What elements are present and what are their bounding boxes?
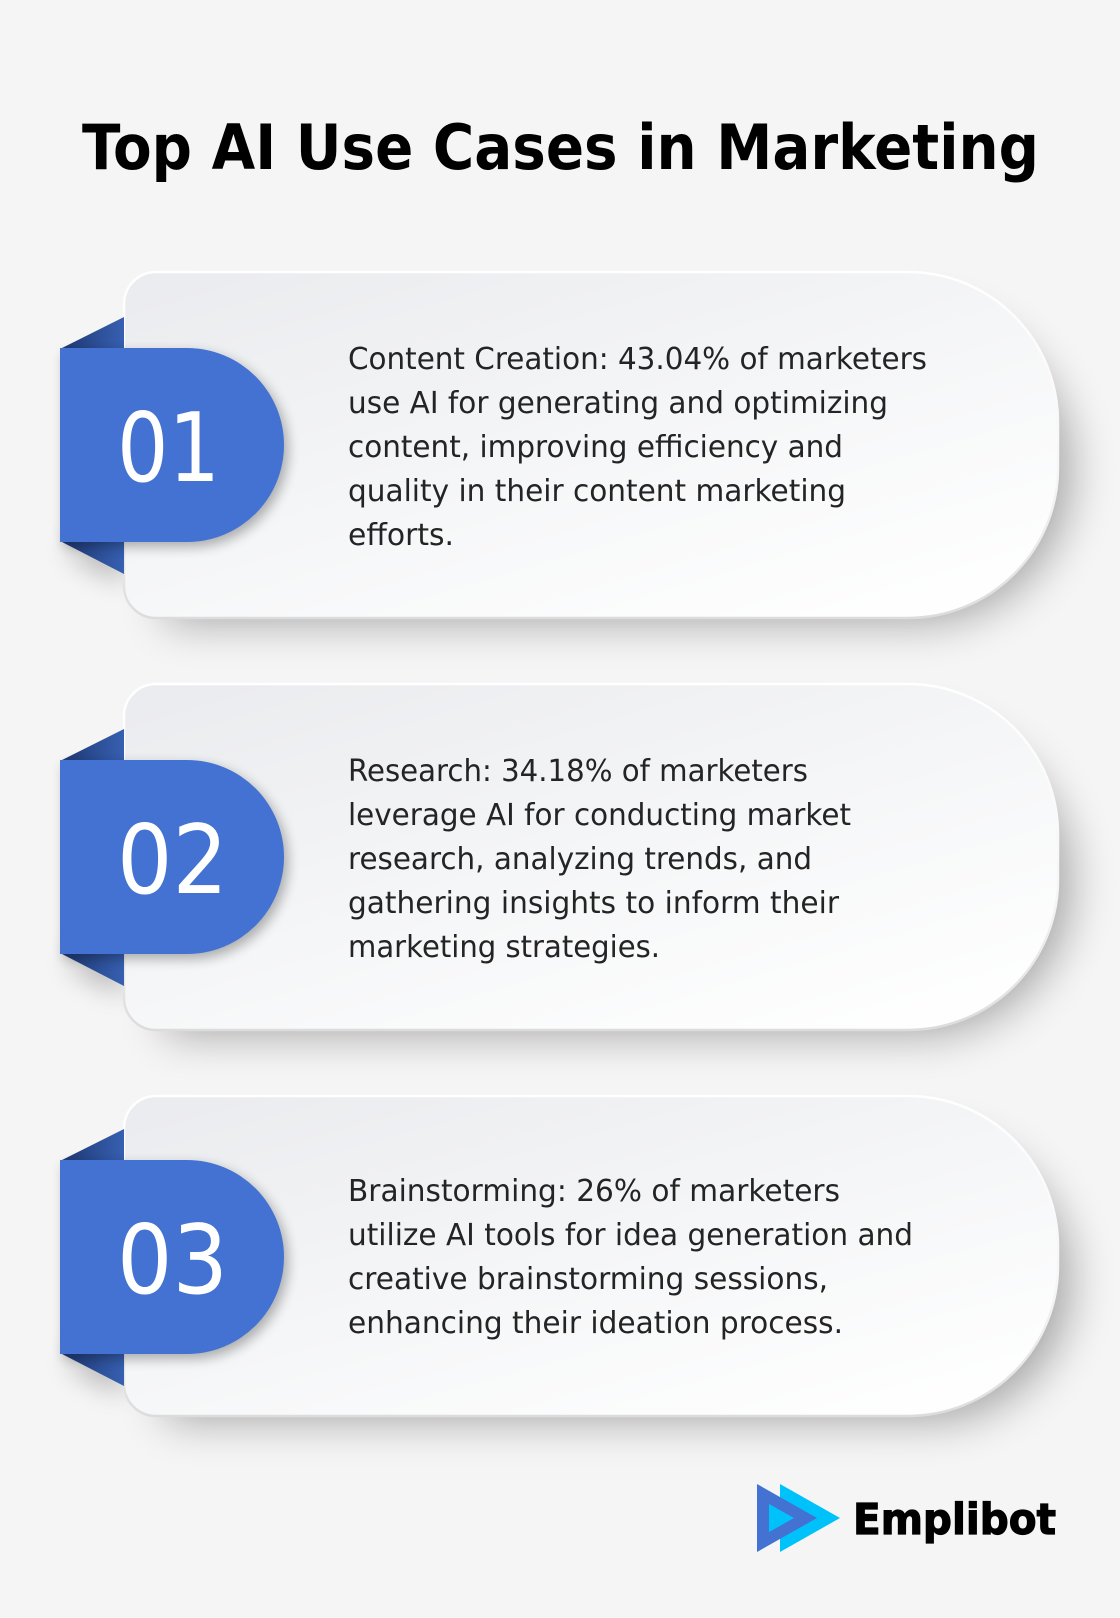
text block: research: marketing strategies.: [348, 930, 660, 965]
icon: ribbon fold top: [62, 317, 124, 348]
icon: ribbon fold bottom: [62, 954, 124, 986]
text block: content creation: efforts.: [348, 518, 454, 553]
logo wordmark: Emplibot: [853, 1495, 1056, 1545]
number badge 01: [60, 348, 284, 542]
text block: content creation: use AI for generating and optimizing: [348, 386, 888, 421]
number badge 01: 01: [117, 394, 220, 504]
text block: research: research, analyzing trends, and: [348, 842, 812, 877]
text block: brainstorming: [348, 1174, 913, 1341]
icon: ribbon fold top: [62, 1129, 124, 1160]
panel: brainstorming: [60, 1096, 1070, 1420]
text block: brainstorming: Brainstorming: 26% of marketers: [348, 1174, 840, 1209]
icon: ribbon fold bottom: [62, 542, 124, 574]
text block: content creation: [348, 342, 927, 553]
title: Top AI Use Cases in Marketing: [82, 111, 1039, 184]
text block: content creation: Content Creation: 43.04% of marketers: [348, 342, 927, 377]
text block: research: [348, 754, 851, 965]
icon: ribbon fold bottom: [62, 1354, 124, 1386]
number badge 02: 02: [117, 806, 228, 916]
text block: content creation: content, improving efficiency and: [348, 430, 843, 465]
icon: ribbon fold top: [62, 729, 124, 760]
number badge 03: [60, 1160, 284, 1354]
number badge 03: 03: [117, 1206, 228, 1316]
text block: research: gathering insights to inform their: [348, 886, 839, 921]
panel: content creation: [60, 272, 1070, 622]
text block: research: Research: 34.18% of marketers: [348, 754, 808, 789]
panel: research: [60, 684, 1070, 1034]
text block: content creation: quality in their content marketing: [348, 474, 846, 509]
text block: brainstorming: enhancing their ideation process.: [348, 1306, 843, 1341]
text block: brainstorming: creative brainstorming sessions,: [348, 1262, 828, 1297]
text block: brainstorming: utilize AI tools for idea generation and: [348, 1218, 913, 1253]
text block: research: leverage AI for conducting market: [348, 798, 851, 833]
icon: play triangles: [757, 1484, 840, 1552]
logo: Emplibot: [757, 1484, 1056, 1552]
number badge 02: [60, 760, 284, 954]
